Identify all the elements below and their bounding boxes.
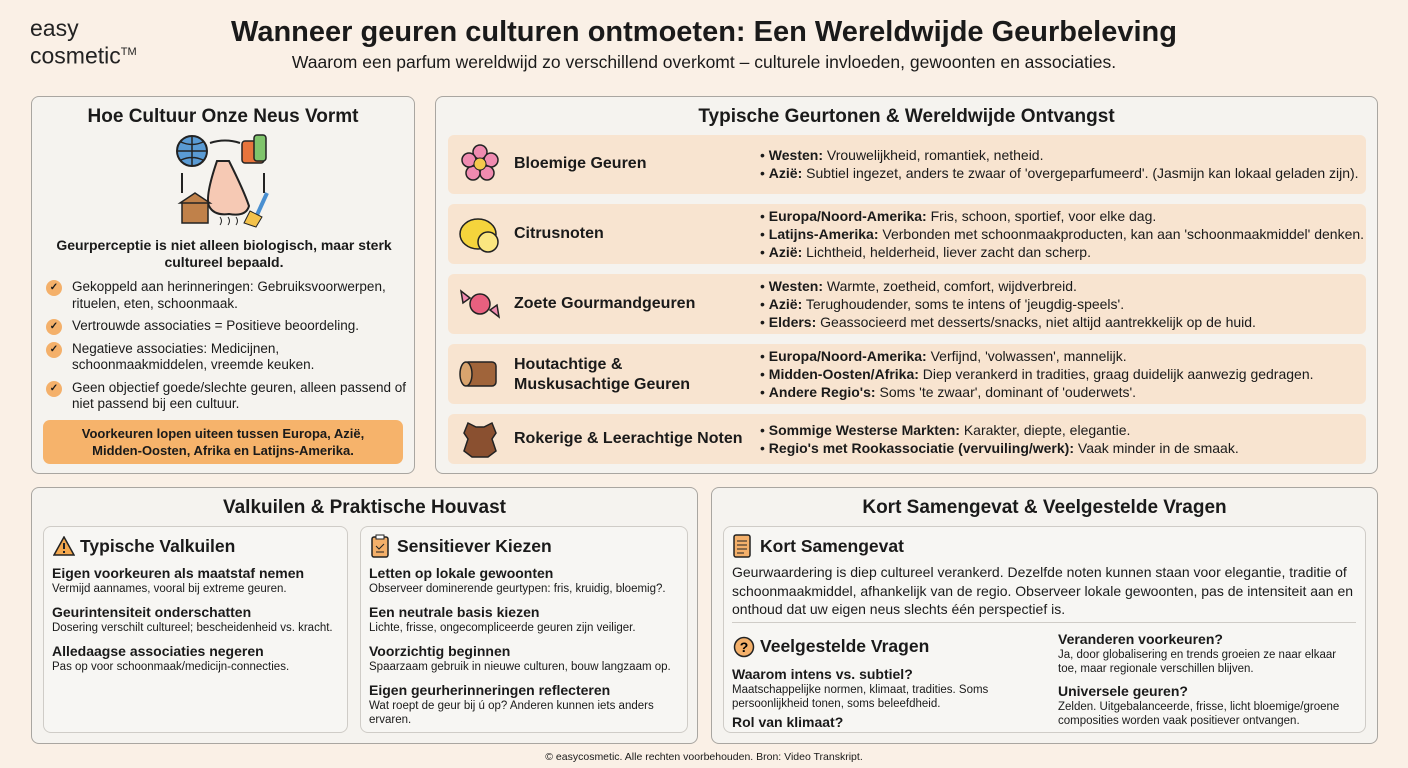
- row: woody: [448, 344, 1366, 404]
- row: woody: • Andere Regio's: Soms 'te zwaar', dominant of 'ouderwets'.: [760, 384, 1136, 400]
- box: choose: Eigen geurherinneringen reflecteren: [369, 682, 610, 698]
- box: summary and faq: Universele geuren?: [1058, 683, 1188, 699]
- box: pitfalls: Vermijd aannames, vooral bij extreme geuren.: [52, 583, 287, 595]
- panel: pitfalls: [31, 487, 698, 744]
- box: summary and faq: Zelden. Uitgebalanceerde, frisse, licht bloemige/groene composities worden vaak positiever ontvangen.: [1058, 701, 1339, 727]
- subtitle: Waarom een parfum wereldwijd zo verschillend overkomt – culturele invloeden, gewoonten en associaties.: [292, 52, 1116, 72]
- icon: log: [459, 361, 497, 387]
- box: summary and faq: Waarom intens vs. subtiel?: [732, 666, 913, 682]
- row: gourmand: • Elders: Geassocieerd met desserts/snacks, niet altijd aantrekkelijk op de huid.: [760, 314, 1256, 330]
- panel: scent notes: [435, 96, 1378, 474]
- icon: flower: [461, 144, 499, 181]
- row: woody: Muskusachtige Geuren: [514, 376, 690, 393]
- icon: clipboard: [371, 534, 389, 558]
- box: choose: Letten op lokale gewoonten: [369, 565, 553, 581]
- box: choose: Observeer dominerende geurtypen: fris, kruidig, bloemig?.: [369, 583, 666, 595]
- row: citrus: • Europa/Noord-Amerika: Fris, schoon, sportief, voor elke dag.: [760, 208, 1156, 224]
- box: choose: Lichte, frisse, ongecompliceerde geuren zijn veiliger.: [369, 622, 636, 634]
- box: choose: Wat roept de geur bij ú op? Anderen kunnen iets anders ervaren.: [369, 700, 654, 726]
- box: pitfalls: Alledaagse associaties negeren: [52, 643, 264, 659]
- panel: summary & FAQ: [711, 487, 1378, 744]
- logo: cosmeticTM: [30, 43, 137, 69]
- row: floral: • Azië: Subtiel ingezet, anders te zwaar of 'overgeparfumeerd'. (Jasmijn kan lokaal geladen zijn).: [760, 165, 1359, 181]
- box: pitfalls: Eigen voorkeuren als maatstaf nemen: [52, 565, 304, 581]
- row: citrus: Citrusnoten: [514, 225, 604, 242]
- box: summary and faq: Veelgestelde Vragen: [760, 636, 929, 656]
- panel: culture: [31, 96, 415, 474]
- row: citrus: [448, 204, 1366, 264]
- row: gourmand: • Westen: Warmte, zoetheid, comfort, wijdverbreid.: [760, 278, 1077, 294]
- box: pitfalls: Pas op voor schoonmaak/medicijn-connecties.: [52, 661, 289, 673]
- row: smoky leather: [448, 414, 1366, 464]
- icon: candy: [460, 289, 500, 319]
- box: choose: Sensitiever Kiezen: [397, 536, 552, 556]
- box: summary and faq: Rol van klimaat?: [732, 714, 843, 730]
- summary text: Geurwaardering is diep cultureel verankerd. Dezelfde noten kunnen staan voor elegantie, traditie of schoonmaakmiddel, afhankelijk van de regio. Observeer lokale gewoonten, pas de intensiteit aan en onthoud dat uw eigen neus slechts één perspectief is.: [732, 564, 1353, 617]
- row: smoky leather: • Regio's met Rookassociatie (vervuiling/werk): Vaak minder in de smaak.: [760, 440, 1239, 456]
- row: gourmand: • Azië: Terughoudender, soms te intens of 'jeugdig-speels'.: [760, 296, 1124, 312]
- list: Negatieve associaties: Medicijnen, schoonmaakmiddelen, vreemde keuken.: [72, 340, 314, 372]
- heading: Typische Geurtonen & Wereldwijde Ontvangst: [698, 106, 1115, 127]
- row: floral: Bloemige Geuren: [514, 155, 646, 172]
- icon: warning: [53, 536, 75, 556]
- icon: document: [733, 534, 751, 558]
- callout: [43, 420, 403, 464]
- box: pitfalls: Typische Valkuilen: [80, 536, 235, 556]
- icon: leather: [463, 422, 497, 458]
- icon: question: [734, 636, 754, 658]
- heading: Hoe Cultuur Onze Neus Vormt: [88, 106, 358, 127]
- icon: question: ?: [740, 639, 748, 655]
- box: summary and faq: [723, 526, 1366, 733]
- icon: nose with culture: [176, 134, 269, 228]
- list: Vertrouwde associaties = Positieve beoordeling.: [72, 318, 359, 333]
- row: smoky leather: Rokerige & Leerachtige Noten: [514, 430, 742, 447]
- box: choose: Spaarzaam gebruik in nieuwe culturen, bouw langzaam op.: [369, 661, 671, 673]
- footer: © easycosmetic. Alle rechten voorbehouden. Bron: Video Transkript.: [545, 751, 863, 763]
- box: summary and faq: Kort Samengevat: [760, 536, 904, 556]
- box: summary and faq: Ja, door globalisering en trends groeien ze naar elkaar toe, maar regionale verschillen blijven.: [1058, 649, 1336, 675]
- box: pitfalls: Dosering verschilt cultureel; bescheidenheid vs. kracht.: [52, 622, 333, 634]
- box: choose: [360, 526, 688, 733]
- row: floral: • Westen: Vrouwelijkheid, romantiek, netheid.: [760, 147, 1044, 163]
- row: citrus: • Azië: Lichtheid, helderheid, liever zacht dan scherp.: [760, 244, 1091, 260]
- box: pitfalls: [43, 526, 348, 733]
- text: intro: Geurperceptie is niet alleen biologisch, maar sterk cultureel bepaald.: [56, 237, 392, 270]
- box: choose: Een neutrale basis kiezen: [369, 604, 539, 620]
- list: [46, 279, 406, 411]
- row: gourmand: [448, 274, 1366, 334]
- row: woody: Houtachtige &: [514, 356, 622, 373]
- heading: Kort Samengevat & Veelgestelde Vragen: [862, 497, 1227, 518]
- row: smoky leather: • Sommige Westerse Markten: Karakter, diepte, elegantie.: [760, 422, 1130, 438]
- row: gourmand: Zoete Gourmandgeuren: [514, 295, 695, 312]
- list: Geen objectief goede/slechte geuren, alleen passend of niet passend bij een cultuur.: [72, 380, 406, 411]
- row: floral: [448, 135, 1366, 194]
- box: choose: Voorzichtig beginnen: [369, 643, 510, 659]
- logo: easy: [30, 15, 79, 41]
- icon: lemon: [459, 218, 499, 253]
- row: woody: • Europa/Noord-Amerika: Verfijnd, 'volwassen', mannelijk.: [760, 348, 1127, 364]
- box: summary and faq: Veranderen voorkeuren?: [1058, 631, 1223, 647]
- row: woody: • Midden-Oosten/Afrika: Diep verankerd in tradities, graag duidelijk aanwezig gedragen.: [760, 366, 1314, 382]
- title: Wanneer geuren culturen ontmoeten: Een Wereldwijde Geurbeleving: [231, 16, 1177, 48]
- heading: Valkuilen & Praktische Houvast: [223, 497, 506, 518]
- logo: [30, 15, 137, 69]
- box: summary and faq: Maatschappelijke normen, klimaat, tradities. Soms persoonlijkheid tonen, soms beleefdheid.: [732, 684, 988, 710]
- list: Gekoppeld aan herinneringen: Gebruiksvoorwerpen, rituelen, eten, schoonmaak.: [72, 279, 386, 310]
- row: citrus: • Latijns-Amerika: Verbonden met schoonmaakproducten, kan aan 'schoonmaakmiddel' denken.: [760, 226, 1364, 242]
- box: pitfalls: Geurintensiteit onderschatten: [52, 604, 251, 620]
- callout: Voorkeuren lopen uiteen tussen Europa, Azië, Midden-Oosten, Afrika en Latijns-Amerika.: [82, 426, 364, 458]
